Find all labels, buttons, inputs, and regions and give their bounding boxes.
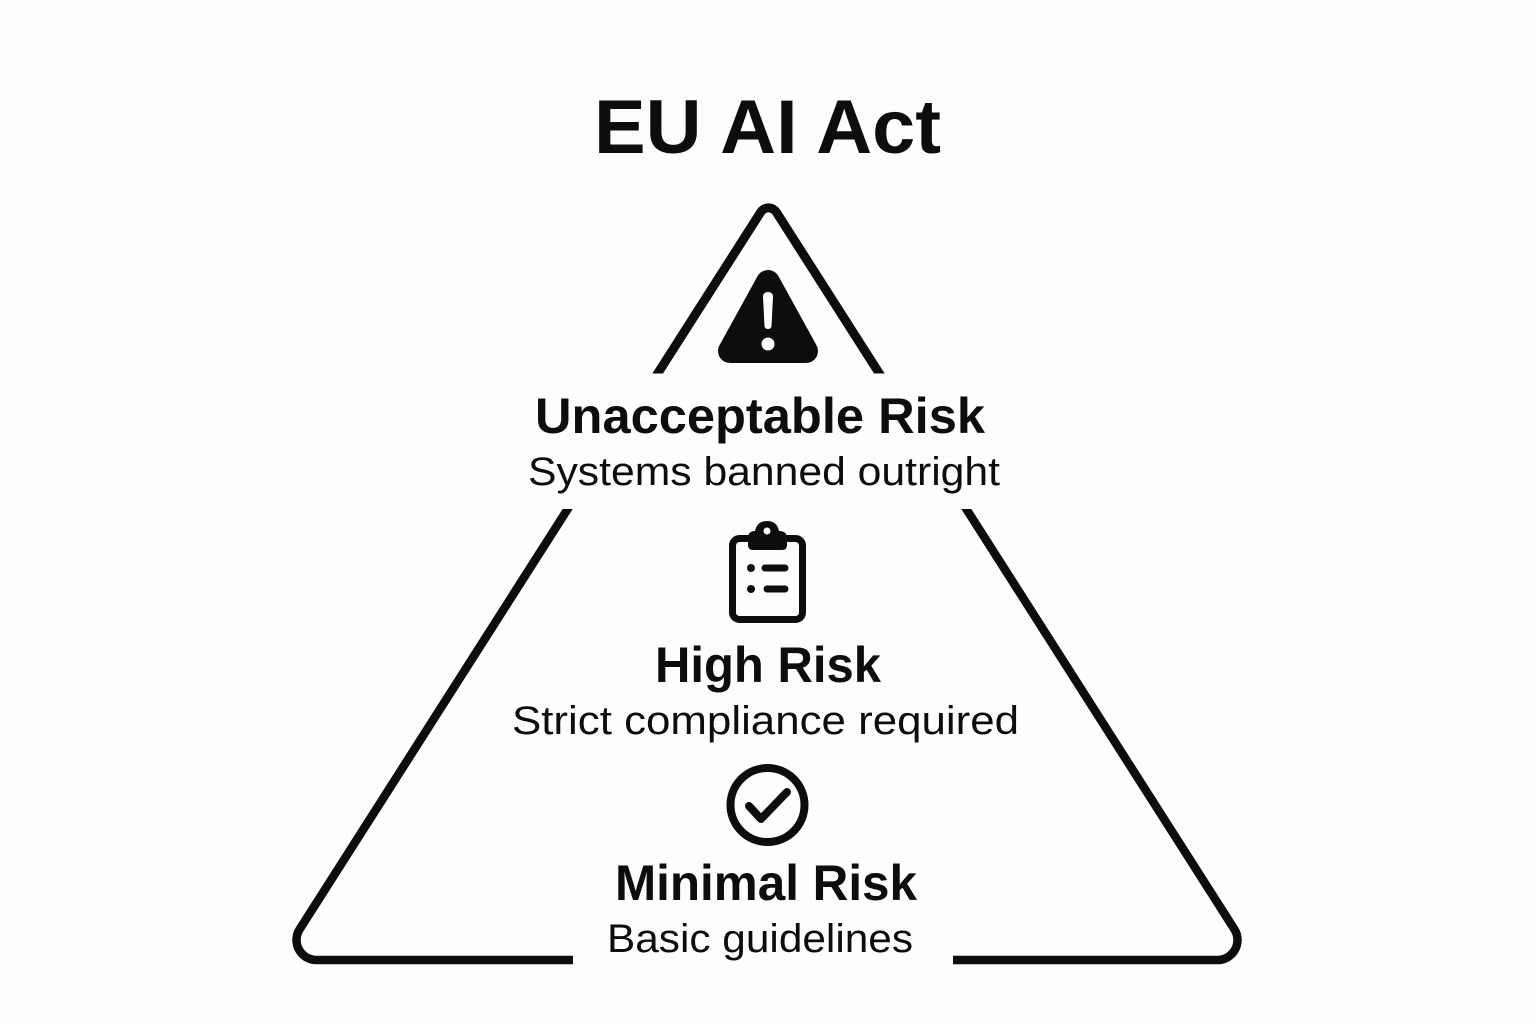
icon: check circle: [730, 768, 804, 842]
icon: clipboard checklist: [732, 521, 802, 620]
pyramid outline: upper section: [650, 208, 887, 385]
tier: unacceptable risk: Systems banned outright: [528, 450, 1000, 494]
tier: minimal risk: [607, 855, 917, 961]
tier: high risk: Strict compliance required: [512, 699, 1019, 743]
tier: unacceptable risk: Unacceptable Risk: [535, 388, 985, 444]
tier: minimal risk: Basic guidelines: [607, 917, 913, 961]
pyramid outline: lower section: [296, 498, 1238, 960]
tier: high risk: High Risk: [655, 637, 881, 693]
title: EU AI Act: [594, 85, 941, 170]
tier: high risk: [512, 637, 1019, 743]
icon: warning triangle: [730, 282, 806, 351]
tier: minimal risk: Minimal Risk: [615, 855, 917, 911]
tier: unacceptable risk: [528, 388, 1000, 494]
infographic: EU AI Act risk pyramid: [292, 100, 1242, 964]
